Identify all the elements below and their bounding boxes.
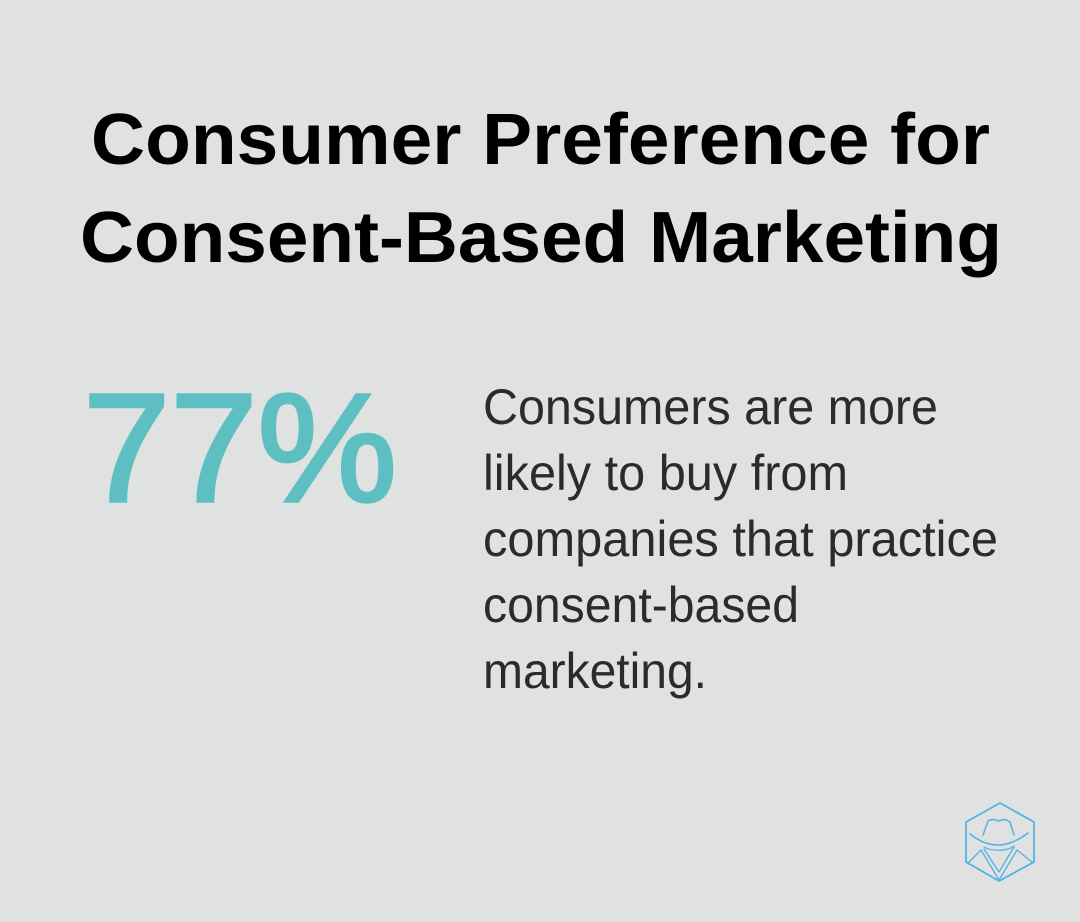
icon: collar — [968, 846, 1032, 880]
description text: companies that practice — [483, 511, 998, 567]
title — [80, 100, 1002, 278]
icon: hat — [970, 820, 1028, 845]
icon: hexagon logo with hat and collar — [966, 803, 1034, 881]
description text: Consumers are more — [483, 379, 938, 435]
title: Consumer Preference for — [91, 100, 990, 180]
description text — [483, 379, 998, 699]
description text: likely to buy from — [483, 445, 848, 501]
title: Consent-Based Marketing — [80, 198, 1002, 278]
description text: consent-based — [483, 577, 799, 633]
icon: hexagon outline — [966, 803, 1034, 881]
description text: marketing. — [483, 643, 707, 699]
statistic: 77%: 77% — [83, 362, 397, 534]
